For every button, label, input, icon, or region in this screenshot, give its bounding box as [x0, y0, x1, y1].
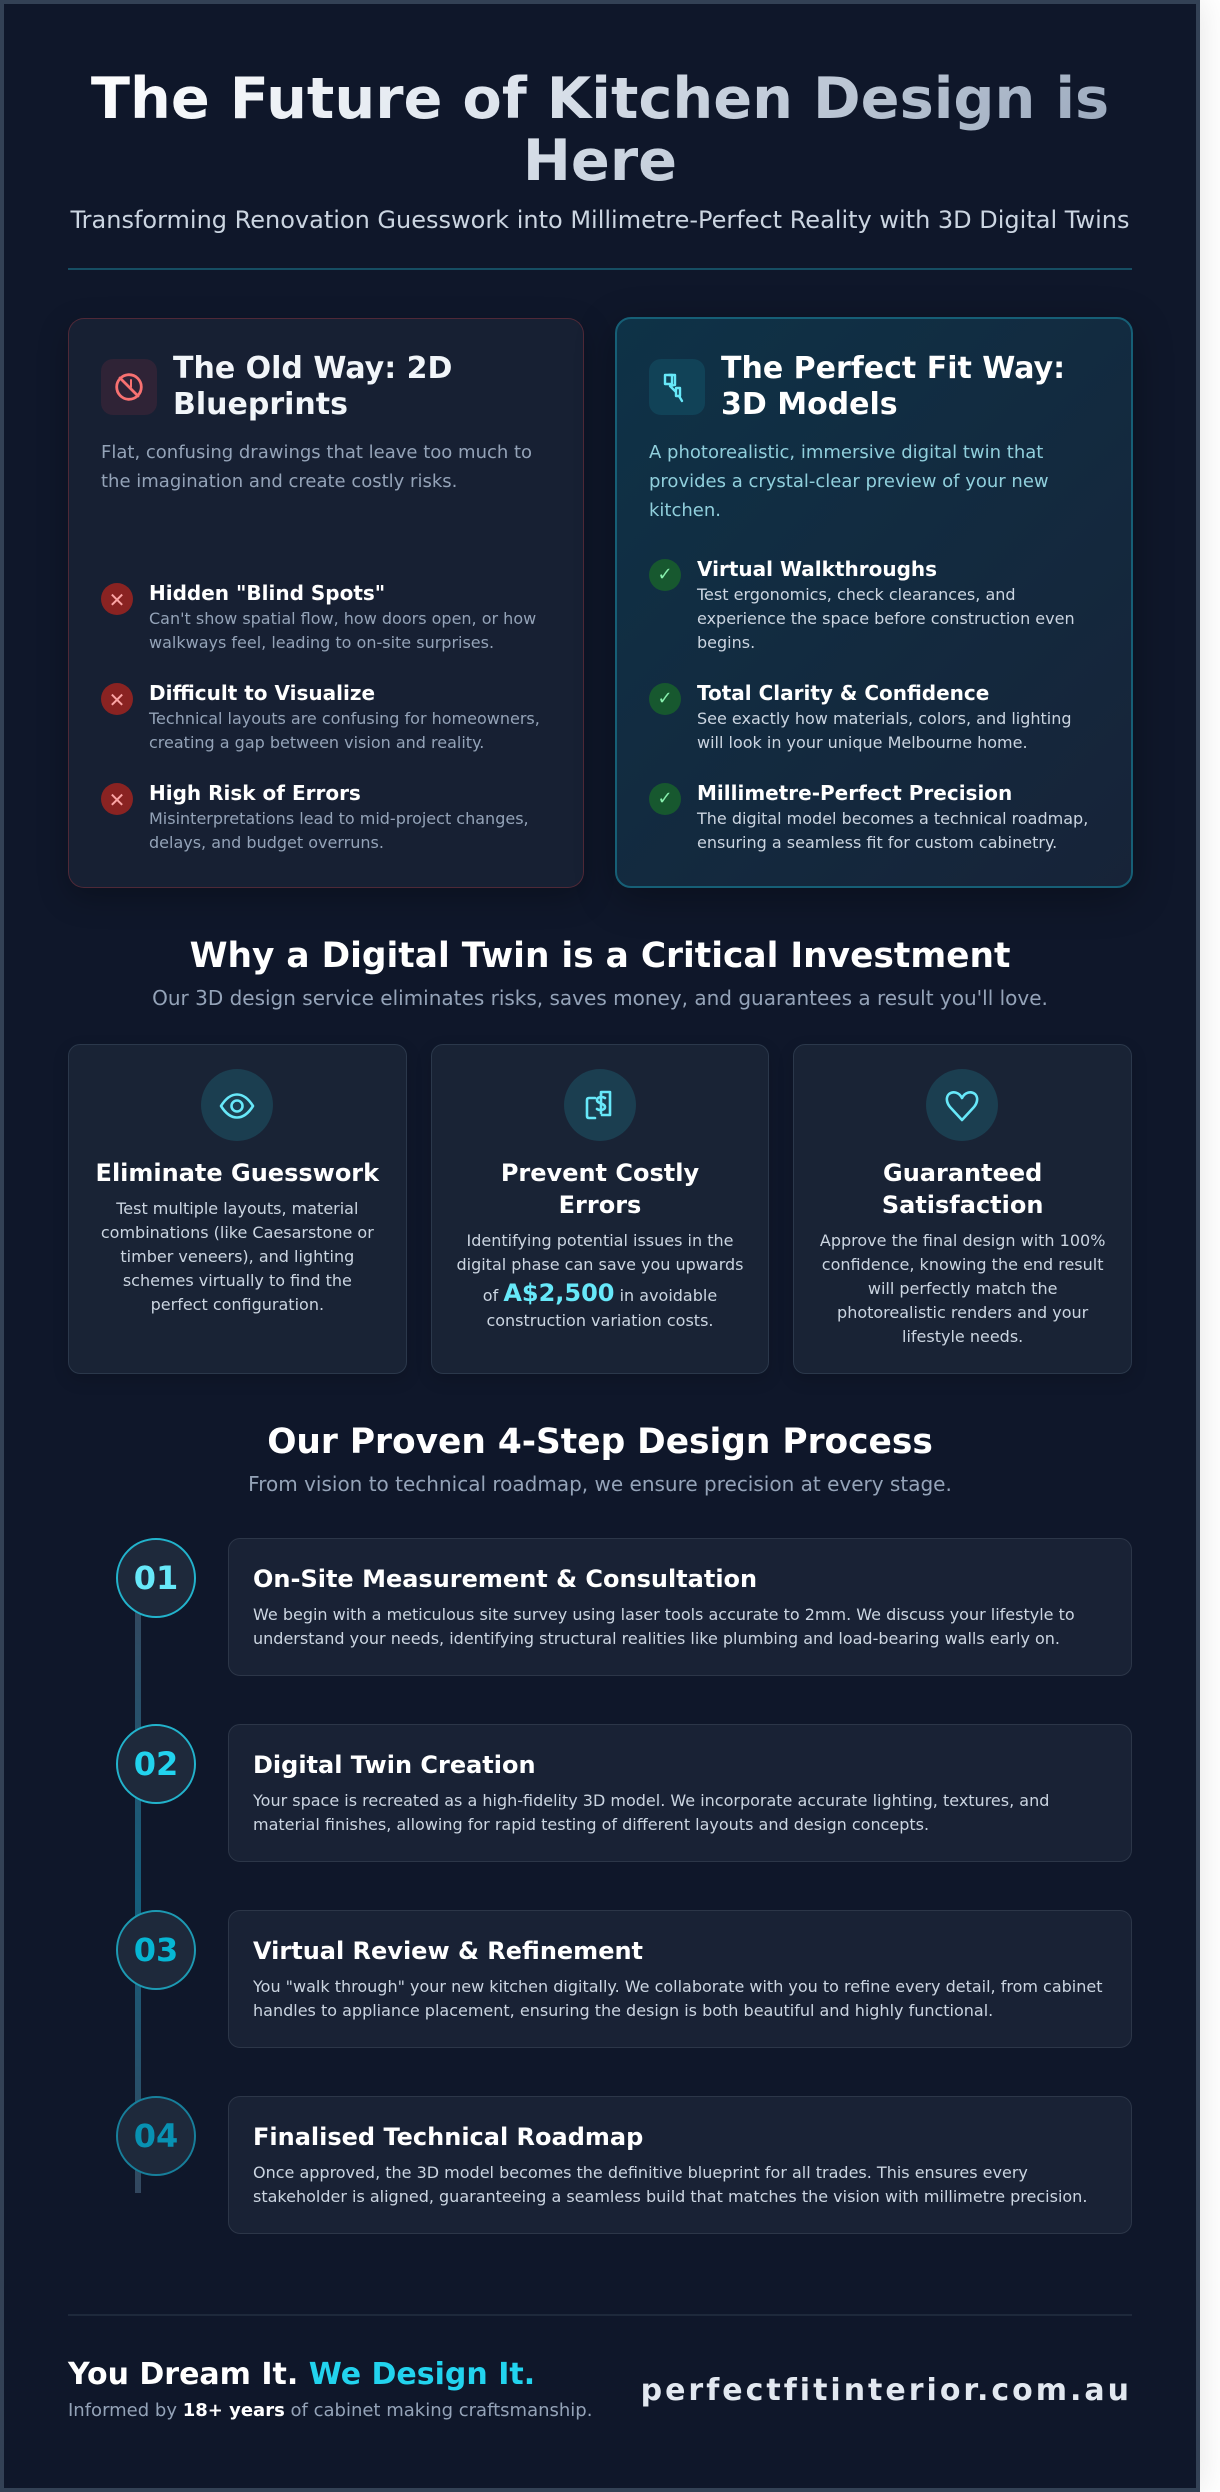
icon: cross 1 — [101, 583, 133, 615]
item: high risk of errors: High Risk of Errors — [149, 781, 361, 805]
item: difficult to visualize: creating a gap between vision and reality. — [149, 733, 484, 752]
title: eliminate guesswork: Eliminate Guesswork — [96, 1159, 379, 1187]
item: difficult to visualize — [148, 681, 540, 752]
step text 04 — [253, 2163, 1087, 2206]
panel: the old way — [68, 318, 584, 888]
panel: eliminate guesswork — [68, 1044, 407, 1374]
step card 01 — [228, 1538, 1132, 1676]
text: eliminate guesswork: Test multiple layouts, material — [116, 1199, 358, 1218]
item: hidden blind spots: walkways feel, leading to on-site surprises. — [149, 633, 494, 652]
text: eliminate guesswork: perfect configuration. — [151, 1295, 324, 1314]
step text 01: We begin with a meticulous site survey using laser tools accurate to 2mm. We discuss your lifestyle to — [253, 1605, 1075, 1624]
item: millimetre precision — [696, 781, 1088, 852]
text: guaranteed satisfaction: will perfectly match the — [868, 1279, 1057, 1298]
step marker 04: 04 — [134, 2117, 178, 2155]
text: eliminate guesswork: combinations (like Caesarstone or — [101, 1223, 374, 1242]
item: millimetre precision: The digital model becomes a technical roadmap, — [697, 809, 1088, 828]
subtitle: Transforming Renovation Guesswork into Millimetre-Perfect Reality with 3D Digital Twins — [71, 206, 1129, 234]
title: Here — [523, 127, 677, 194]
heading: design process: Our Proven 4-Step Design Process — [267, 1422, 933, 1462]
heading: old way — [173, 351, 452, 422]
text: old way intro: Flat, confusing drawings that leave too much to — [101, 442, 532, 463]
title: prevent costly errors: Prevent Costly — [501, 1159, 699, 1187]
text: prevent costly errors: of A$2,500 in avoidable — [483, 1279, 717, 1307]
item: difficult to visualize: Difficult to Visualize — [149, 681, 375, 705]
icon: check 2 — [649, 683, 681, 715]
step title 04: Finalised Technical Roadmap — [253, 2123, 643, 2151]
text: guaranteed satisfaction — [820, 1231, 1105, 1346]
item: high risk of errors — [149, 781, 529, 852]
title: guaranteed satisfaction — [882, 1159, 1043, 1219]
text: perfect fit intro — [649, 442, 1049, 521]
title: prevent costly errors — [501, 1159, 699, 1219]
step marker 01: 01 — [134, 1559, 178, 1597]
item: virtual walkthroughs: Virtual Walkthroughs — [697, 557, 937, 581]
heading: old way: The Old Way: 2D — [173, 351, 452, 386]
icon: cross 2: ✕ — [109, 688, 125, 712]
step text 02: material finishes, allowing for rapid testing of different layouts and design concepts. — [253, 1815, 929, 1834]
header divider — [68, 268, 1132, 270]
text: perfect fit intro: kitchen. — [649, 500, 721, 521]
step text 04: stakeholder is aligned, guaranteeing a seamless build that matches the vision with millimetre precision. — [253, 2187, 1087, 2206]
text: eliminate guesswork: schemes virtually to find the — [123, 1271, 352, 1290]
item: hidden blind spots: Can't show spatial flow, how doors open, or how — [149, 609, 536, 628]
icon: 3d cube — [649, 359, 705, 415]
item: total clarity: will look in your unique Melbourne home. — [697, 733, 1028, 752]
item: total clarity: Total Clarity & Confidence — [697, 681, 989, 705]
icon: cross 3 — [101, 783, 133, 815]
item: virtual walkthroughs: begins. — [697, 633, 755, 652]
icon: check 1: ✓ — [657, 564, 673, 585]
icon: check 3 — [649, 783, 681, 815]
step text 03: You "walk through" your new kitchen digitally. We collaborate with you to refine every detail, from cabinet — [253, 1977, 1102, 1996]
item: high risk of errors: delays, and budget overruns. — [149, 833, 384, 852]
icon: heart — [926, 1069, 998, 1141]
text: perfect fit intro: provides a crystal-clear preview of your new — [649, 471, 1049, 492]
icon: money — [564, 1069, 636, 1141]
text: old way intro — [101, 442, 532, 492]
text: prevent costly errors — [456, 1231, 743, 1330]
step title 01: On-Site Measurement & Consultation — [253, 1565, 757, 1593]
footer tagline: You Dream It. We Design It. — [68, 2357, 535, 2392]
title: guaranteed satisfaction: Satisfaction — [882, 1191, 1043, 1219]
step marker 04 — [116, 2096, 196, 2176]
icon: check 3: ✓ — [657, 788, 673, 809]
panel: guaranteed satisfaction — [793, 1044, 1132, 1374]
item: virtual walkthroughs: Test ergonomics, check clearances, and — [697, 585, 1016, 604]
item: millimetre precision: Millimetre-Perfect Precision — [697, 781, 1012, 805]
icon: check 2: ✓ — [657, 688, 673, 709]
icon: eye — [201, 1069, 273, 1141]
timeline line — [135, 1600, 141, 2193]
step card 02 — [228, 1724, 1132, 1862]
step marker 01 — [116, 1538, 196, 1618]
subheading: why: Our 3D design service eliminates risks, saves money, and guarantees a result you'll love. — [152, 986, 1048, 1010]
item: total clarity: See exactly how materials, colors, and lighting — [697, 709, 1072, 728]
step title 03: Virtual Review & Refinement — [253, 1937, 643, 1965]
footer divider — [68, 2314, 1132, 2316]
text: perfect fit intro: A photorealistic, immersive digital twin that — [649, 442, 1043, 463]
panel: the perfect fit way — [615, 317, 1133, 888]
text: prevent costly errors: Identifying potential issues in the — [467, 1231, 733, 1250]
text: guaranteed satisfaction: lifestyle needs. — [902, 1327, 1023, 1346]
step text 04: Once approved, the 3D model becomes the definitive blueprint for all trades. This ensures every — [253, 2163, 1028, 2182]
icon: cross 3: ✕ — [109, 788, 125, 812]
item: virtual walkthroughs — [696, 557, 1075, 652]
item: hidden blind spots: Hidden "Blind Spots" — [149, 581, 385, 605]
panel: prevent costly errors — [431, 1044, 769, 1374]
text: guaranteed satisfaction: Approve the final design with 100% — [820, 1231, 1105, 1250]
icon: ban — [101, 359, 157, 415]
text: old way intro: the imagination and create costly risks. — [101, 471, 457, 492]
item: millimetre precision: ensuring a seamless fit for custom cabinetry. — [697, 833, 1057, 852]
footer note: Informed by 18+ years of cabinet making craftsmanship. — [68, 2400, 592, 2420]
item: hidden blind spots — [149, 581, 536, 652]
title: prevent costly errors: Errors — [559, 1191, 641, 1219]
step text 01: understand your needs, identifying structural realities like plumbing and load-bearing walls early on. — [253, 1629, 1060, 1648]
heading: perfect fit way — [721, 351, 1065, 422]
footer website: perfectfitinterior.com.au — [641, 2373, 1132, 2408]
subheading: process: From vision to technical roadmap, we ensure precision at every stage. — [248, 1472, 952, 1496]
step marker 02 — [116, 1724, 196, 1804]
title: guaranteed satisfaction: Guaranteed — [883, 1159, 1042, 1187]
text: prevent costly errors: construction variation costs. — [486, 1311, 714, 1330]
step text 03: handles to appliance placement, ensuring the design is both beautiful and highly functional. — [253, 2001, 993, 2020]
text: guaranteed satisfaction: photorealistic renders and your — [837, 1303, 1088, 1322]
text: eliminate guesswork: timber veneers), and lighting — [120, 1247, 354, 1266]
title: The Future of Kitchen Design is — [91, 65, 1109, 132]
step text 02 — [253, 1791, 1049, 1834]
step text 02: Your space is recreated as a high-fidelity 3D model. We incorporate accurate lighting, textures, and — [253, 1791, 1049, 1810]
step text 01 — [253, 1605, 1075, 1648]
item: difficult to visualize: Technical layouts are confusing for homeowners, — [149, 709, 540, 728]
step marker 03: 03 — [134, 1931, 178, 1969]
text: eliminate guesswork — [101, 1199, 374, 1314]
icon: cross 2 — [101, 683, 133, 715]
step marker 03 — [116, 1910, 196, 1990]
icon: cross 1: ✕ — [109, 588, 125, 612]
step card 03 — [228, 1910, 1132, 2048]
heading: perfect fit way: The Perfect Fit Way: — [721, 351, 1065, 386]
item: total clarity — [697, 681, 1072, 752]
item: high risk of errors: Misinterpretations lead to mid-project changes, — [149, 809, 529, 828]
heading: why a digital twin: Why a Digital Twin is a Critical Investment — [190, 936, 1010, 976]
icon: check 1 — [649, 559, 681, 591]
text: prevent costly errors: digital phase can save you upwards — [456, 1255, 743, 1274]
title — [68, 68, 1132, 192]
heading: perfect fit way: 3D Models — [721, 387, 898, 422]
step text 03 — [253, 1977, 1102, 2020]
step title 02: Digital Twin Creation — [253, 1751, 536, 1779]
heading: old way: Blueprints — [173, 387, 348, 422]
text: guaranteed satisfaction: confidence, knowing the end result — [822, 1255, 1104, 1274]
step card 04 — [228, 2096, 1132, 2234]
step marker 02: 02 — [134, 1745, 178, 1783]
item: virtual walkthroughs: experience the space before construction even — [697, 609, 1075, 628]
